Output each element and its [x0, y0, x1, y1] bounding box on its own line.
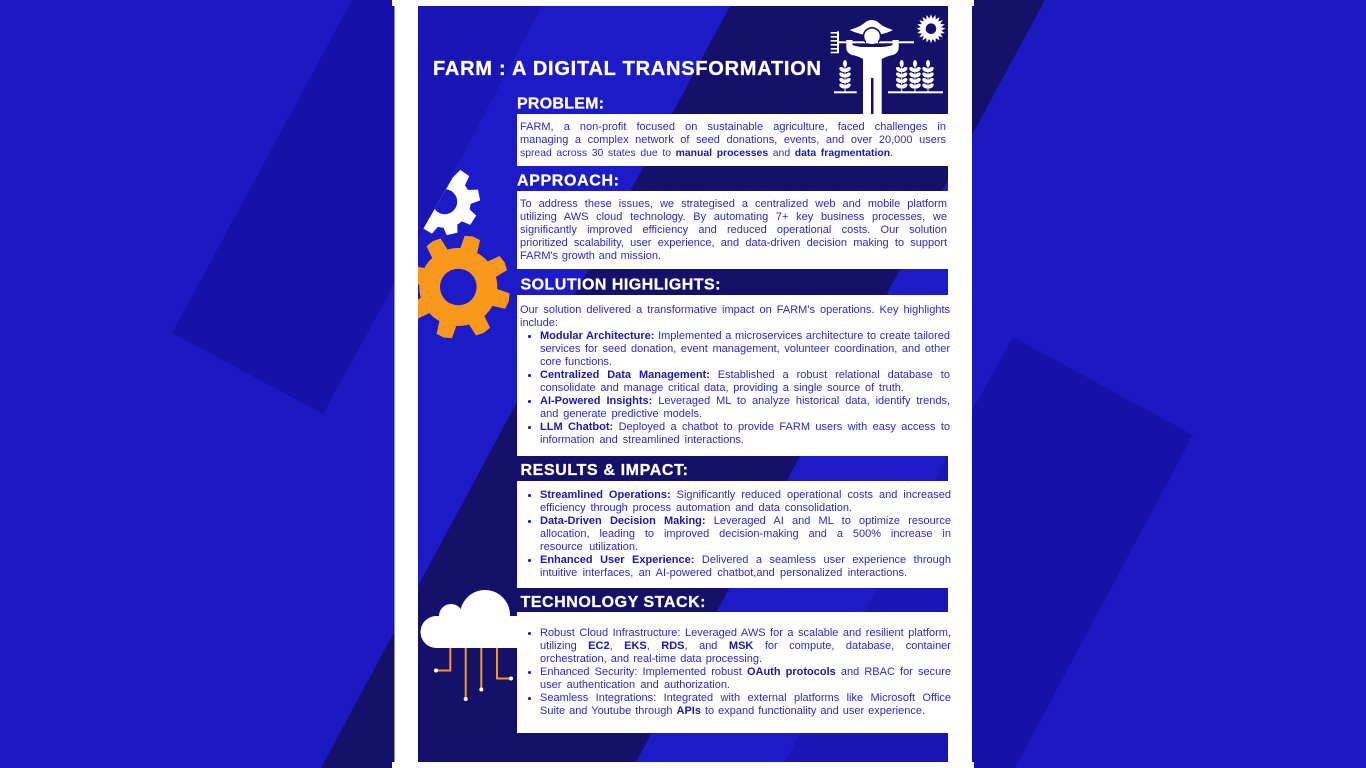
- panel: results and impact text: [517, 481, 953, 588]
- panel: approach text: [517, 191, 953, 269]
- icon: row of three wheat plants: [888, 60, 943, 93]
- heading: solution highlights: SOLUTION HIGHLIGHTS:: [520, 276, 720, 294]
- cloud: [420, 590, 518, 648]
- heading: problem: PROBLEM:: [517, 96, 604, 112]
- icon: single wheat plant: [834, 60, 857, 93]
- panel: approach text: To address these issues, we strategised a centralized web and mobile platform: [520, 198, 947, 210]
- panel: solution highlights text: information and streamlined interactions.: [540, 434, 744, 446]
- panel: results and impact text: efficiency through process automation and data consolidation.: [540, 502, 852, 514]
- panel: technology stack text: Robust Cloud Infrastructure: Leveraged AWS for a scalable and resilient platform,: [540, 627, 951, 639]
- heading: approach: APPROACH:: [517, 172, 619, 190]
- panel: solution highlights text: Modular Architecture: Implemented a microservices architecture to create tailored: [540, 330, 950, 342]
- panel: results and impact text: Enhanced User Experience: Delivered a seamless user experience through: [540, 554, 951, 566]
- icon: white gear: [424, 170, 480, 236]
- farmer body: [846, 40, 899, 114]
- panel: solution highlights text: Centralized Data Management: Established a robust relational database to: [540, 369, 950, 381]
- panel: solution highlights text: include:: [520, 317, 558, 329]
- panel: problem text: managing a complex network of seed donations, events, and over 20,000 users: [520, 134, 946, 146]
- panel: technology stack text: Suite and Youtube through APIs to expand functionality and user experience.: [540, 705, 925, 717]
- rake and pole: [831, 31, 914, 53]
- panel: approach text: prioritized scalability, user experience, and data-driven decision making to support: [520, 237, 947, 249]
- panel: results and impact text: resource utilization.: [540, 541, 638, 553]
- circuit end dots: [434, 668, 513, 701]
- panel: solution highlights text: Our solution delivered a transformative impact on FARM's operations. Key highlights: [520, 304, 950, 316]
- panel: problem text: FARM, a non-profit focused on sustainable agriculture, faced challenges in: [520, 121, 946, 133]
- panel: results and impact text: allocation, leading to improved decision-making and a 500% increase in: [540, 528, 951, 540]
- panel: technology stack text: utilizing EC2, EKS, RDS, and MSK for compute, database, container: [540, 640, 951, 652]
- panel: technology stack text: Seamless Integrations: Integrated with external platforms like Microsoft Office: [540, 692, 951, 704]
- panel: approach text: FARM's growth and mission.: [520, 250, 661, 262]
- panel: results and impact text: Streamlined Operations: Significantly reduced operational costs and increased: [540, 489, 951, 501]
- icon: orange gear: [418, 236, 510, 338]
- panel: problem text: [517, 114, 953, 166]
- icon: cloud with circuit lines: [420, 590, 517, 701]
- panel: solution highlights text: AI-Powered Insights: Leveraged ML to analyze historical data, identify trends,: [540, 395, 950, 407]
- panel: technology stack text: user authentication and authorization.: [540, 679, 730, 691]
- panel: solution highlights text: core functions.: [540, 356, 612, 368]
- title: FARM : A DIGITAL TRANSFORMATION: [433, 58, 821, 80]
- icon: sun: [916, 14, 946, 43]
- panel: technology stack text: Enhanced Security: Implemented robust OAuth protocols and RBAC for secure: [540, 666, 951, 678]
- panel: technology stack text: orchestration, and real-time data processing.: [540, 653, 762, 665]
- panel: problem text: spread across 30 states due to manual processes and data fragmentation.: [520, 148, 893, 159]
- panel: technology stack text: [517, 612, 953, 733]
- heading: results and impact: RESULTS & IMPACT:: [520, 462, 688, 479]
- heading: technology stack: TECHNOLOGY STACK:: [520, 594, 706, 611]
- farmer head and hat: [850, 20, 893, 46]
- white page frame: [392, 0, 974, 768]
- panel: solution highlights text: [517, 295, 953, 456]
- panel: approach text: significantly improved efficiency and reduced operational costs. Our solution: [520, 224, 947, 236]
- panel: solution highlights text: LLM Chatbot: Deployed a chatbot to provide FARM users with easy access to: [540, 421, 950, 433]
- inner poster background: [418, 6, 948, 762]
- panel: solution highlights text: services for seed donation, event management, volunteer coordination, and other: [540, 343, 950, 355]
- icon: farmer with rake, sun and wheat: [830, 14, 946, 114]
- panel: results and impact text: intuitive interfaces, an AI-powered chatbot,and personalized interactions.: [540, 567, 907, 579]
- panel: solution highlights text: consolidate and manage critical data, providing a single source of truth.: [540, 382, 904, 394]
- panel: solution highlights text: and generate predictive models.: [540, 408, 702, 420]
- panel: results and impact text: Data-Driven Decision Making: Leveraged AI and ML to optimize resource: [540, 515, 951, 527]
- circuit wires: [436, 646, 511, 699]
- panel: approach text: utilizing AWS cloud technology. By automating 7+ key business processes, we: [520, 211, 947, 223]
